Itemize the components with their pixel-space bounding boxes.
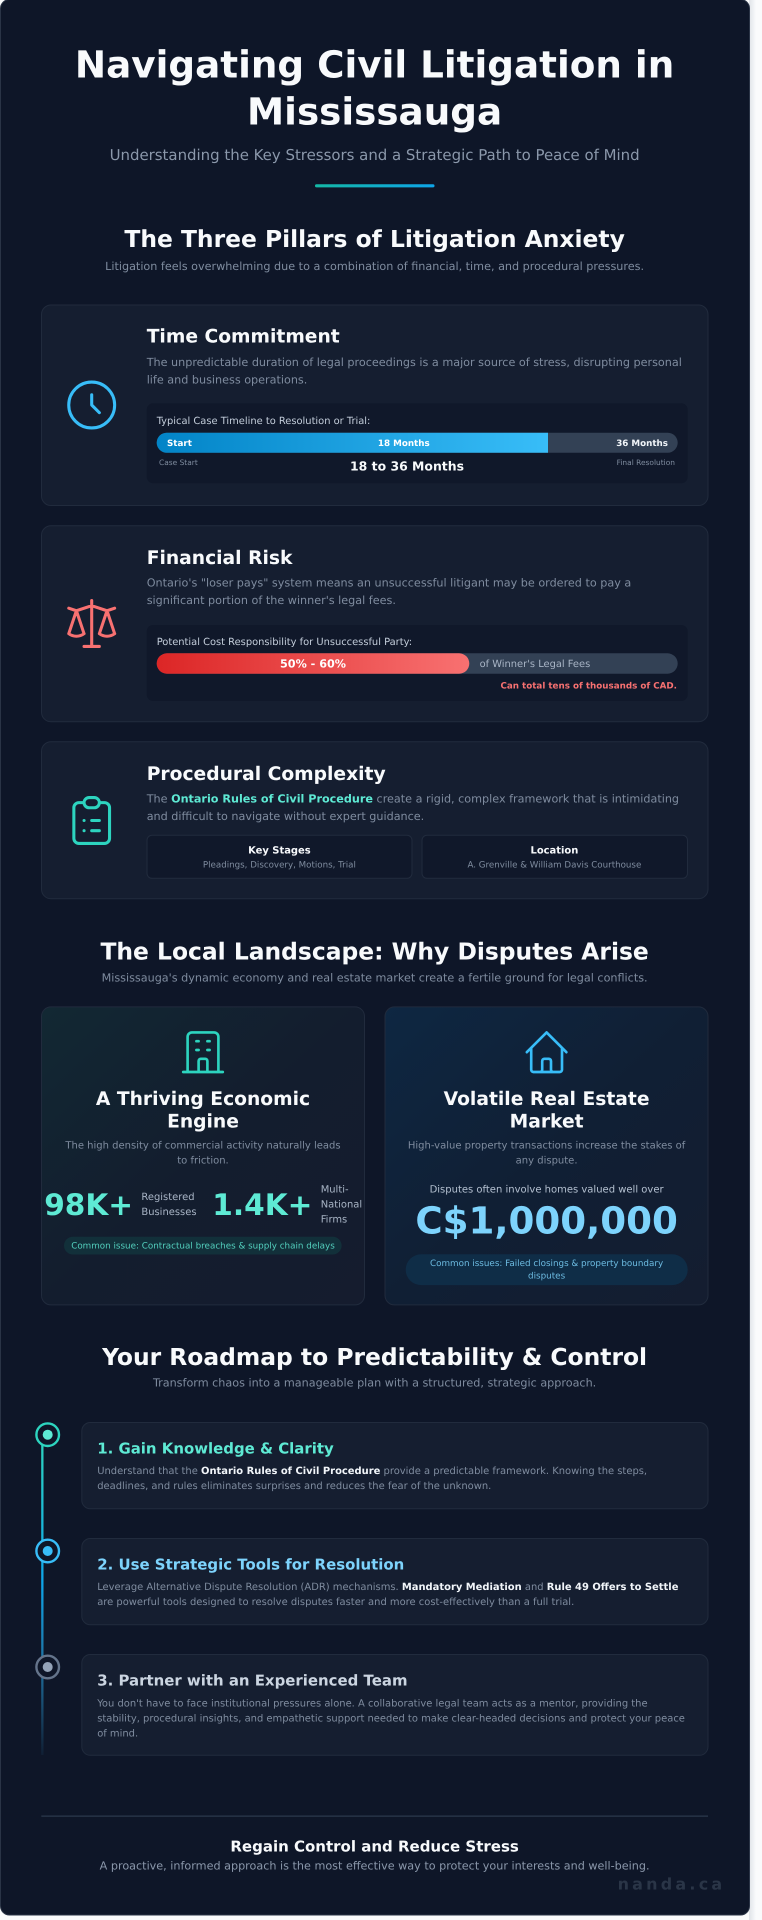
step 1 card: [82, 1422, 708, 1509]
subtitle: Understanding the Key Stressors and a Strategic Path to Peace of Mind: [110, 146, 640, 164]
section heading: local landscape: [100, 937, 649, 985]
info box: key stages: [147, 835, 412, 878]
chart: case timeline: Case Start: [159, 458, 198, 467]
chart: case timeline: 18 Months: [378, 439, 430, 449]
step 2 card: Leverage Alternative Dispute Resolution (ADR) mechanisms. Mandatory Mediation and Rule 49 Offers to Settle: [97, 1582, 679, 1593]
section heading: three pillars: [105, 225, 644, 273]
icon: house: [527, 1032, 566, 1072]
panel: time commitment: [42, 305, 708, 506]
description: real estate market: High-value property transactions increase the stakes of: [408, 1140, 686, 1151]
heading: economic engine: A Thriving Economic: [96, 1089, 310, 1110]
description: time commitment: [146, 356, 682, 386]
title: [75, 42, 674, 133]
icon: office building: [183, 1032, 223, 1072]
chart: case timeline: Final Resolution: [617, 458, 675, 467]
heading: real estate market: Market: [510, 1111, 584, 1132]
heading: time commitment: Time Commitment: [147, 327, 340, 348]
page shadow edge: [749, 0, 756, 1920]
chart: case timeline: [147, 403, 688, 483]
chart: case timeline: 18 to 36 Months: [350, 459, 464, 474]
chart: case timeline: 36 Months: [616, 439, 668, 449]
stat: multi-national firms: National: [321, 1200, 362, 1210]
description: financial risk: significant portion of the winner's legal fees.: [147, 594, 396, 607]
panel: financial risk: [42, 526, 708, 722]
info box: location: Location: [530, 845, 578, 856]
heading: real estate market: [444, 1089, 650, 1132]
step 1 card: deadlines, and rules eliminates surprises and reduces the fear of the unknown.: [97, 1481, 491, 1492]
chart: cost responsibility: Can total tens of thousands of CAD.: [500, 681, 677, 691]
chip: common issues: Common issues: Failed closings & property boundary: [430, 1259, 663, 1269]
heading: real estate market: Volatile Real Estate: [444, 1089, 650, 1110]
step 1 card: 1. Gain Knowledge & Clarity: [97, 1439, 334, 1457]
stat: multi-national firms: 1.4K+: [212, 1188, 312, 1222]
stat: multi-national firms: Multi-: [321, 1185, 349, 1196]
stat: registered businesses: 98K+: [44, 1188, 133, 1222]
stat: multi-national firms: Firms: [321, 1214, 347, 1225]
step 3 card: You don't have to face institutional pressures alone. A collaborative legal team acts as a mentor, providing the: [96, 1698, 648, 1709]
chip: common issue: [64, 1237, 342, 1254]
section heading: local landscape: Mississauga's dynamic economy and real estate market create a fertile ground for legal conflicts.: [102, 972, 648, 985]
step 3 marker: [36, 1656, 59, 1678]
info box: key stages: Pleadings, Discovery, Motions, Trial: [203, 860, 356, 870]
step 3 card: of mind.: [97, 1728, 138, 1739]
description: real estate market: [408, 1140, 686, 1166]
footer: Regain Control and Reduce Stress: [230, 1838, 519, 1856]
stat: home value: Disputes often involve homes valued well over: [430, 1185, 664, 1196]
info box: location: [422, 835, 688, 878]
stat: home value: C$1,000,000: [415, 1198, 678, 1242]
chart: cost responsibility: of Winner's Legal Fees: [480, 659, 590, 670]
section heading: roadmap: Transform chaos into a manageable plan with a structured, strategic approach.: [152, 1377, 596, 1390]
chart: cost responsibility: 50% - 60%: [280, 657, 346, 670]
description: economic engine: to friction.: [177, 1155, 229, 1166]
title: Navigating Civil Litigation in: [75, 42, 674, 86]
info box: key stages: Key Stages: [248, 845, 311, 856]
icon: scales: [69, 601, 115, 646]
icon: clock: [69, 382, 115, 428]
description: time commitment: The unpredictable duration of legal proceedings is a major source of stress, disrupting personal: [146, 356, 682, 369]
footer: A proactive, informed approach is the most effective way to protect your interests and well-being.: [100, 1859, 650, 1872]
heading: procedural complexity: Procedural Complexity: [147, 764, 386, 785]
chart: case timeline: Start: [167, 439, 192, 449]
panel: procedural complexity: [42, 742, 708, 899]
section heading: roadmap: [101, 1343, 647, 1390]
step 2 card: 2. Use Strategic Tools for Resolution: [97, 1555, 404, 1573]
step 2 card: are powerful tools designed to resolve disputes faster and more cost-effectively than a full trial.: [97, 1597, 574, 1608]
chip: common issues: disputes: [528, 1272, 566, 1282]
chart: case timeline: Typical Case Timeline to Resolution or Trial:: [156, 416, 370, 427]
step 3 card: [82, 1654, 708, 1755]
stat: registered businesses: Businesses: [141, 1207, 197, 1218]
icon: clipboard: [74, 798, 110, 843]
description: real estate market: any dispute.: [516, 1155, 578, 1166]
description: financial risk: [147, 577, 631, 607]
description: time commitment: life and business operations.: [147, 373, 307, 386]
panel: real estate market: [385, 1007, 708, 1305]
stat: multi-national firms: [212, 1185, 362, 1225]
heading: economic engine: [96, 1089, 310, 1132]
chart: cost responsibility: [147, 625, 688, 701]
step 2 card: [82, 1538, 708, 1625]
description: procedural complexity: and difficult to navigate without expert guidance.: [147, 810, 424, 823]
title divider: [315, 184, 434, 187]
description: financial risk: Ontario's "loser pays" system means an unsuccessful litigant may be ordered to pay a: [147, 577, 631, 590]
description: procedural complexity: [146, 793, 679, 823]
heading: economic engine: Engine: [167, 1111, 239, 1132]
timeline line: [41, 1440, 44, 1755]
description: economic engine: [64, 1140, 341, 1166]
section heading: roadmap: Your Roadmap to Predictability & Control: [101, 1343, 647, 1371]
info box: location: A. Grenville & William Davis Courthouse: [467, 860, 641, 870]
step 3 card: stability, procedural insights, and empathetic support needed to make clear-headed decisions and protect your peace: [97, 1713, 685, 1724]
description: procedural complexity: The Ontario Rules of Civil Procedure create a rigid, complex framework that is intimidating: [146, 793, 679, 806]
step 3 card: 3. Partner with an Experienced Team: [97, 1672, 408, 1690]
section heading: three pillars: The Three Pillars of Litigation Anxiety: [124, 225, 625, 253]
chip: common issue: Common issue: Contractual breaches & supply chain delays: [71, 1241, 335, 1251]
stat: registered businesses: Registered: [141, 1192, 195, 1203]
description: economic engine: The high density of commercial activity naturally leads: [64, 1140, 341, 1151]
section heading: local landscape: The Local Landscape: Why Disputes Arise: [100, 937, 649, 965]
heading: financial risk: Financial Risk: [147, 548, 293, 569]
step 1 card: Understand that the Ontario Rules of Civil Procedure provide a predictable framework. Knowing the steps,: [97, 1466, 647, 1477]
watermark: nanda.ca: [618, 1874, 725, 1893]
stat: registered businesses: [44, 1188, 197, 1222]
footer: [100, 1838, 650, 1872]
chip: common issues: [406, 1254, 688, 1285]
step 1 marker: [36, 1423, 59, 1446]
title: Mississauga: [247, 89, 502, 133]
section heading: three pillars: Litigation feels overwhelming due to a combination of financial, time, and procedural pressures.: [105, 260, 644, 273]
panel: economic engine: [42, 1007, 364, 1305]
chart: cost responsibility: Potential Cost Responsibility for Unsuccessful Party:: [157, 637, 412, 648]
step 2 marker: [36, 1540, 59, 1562]
